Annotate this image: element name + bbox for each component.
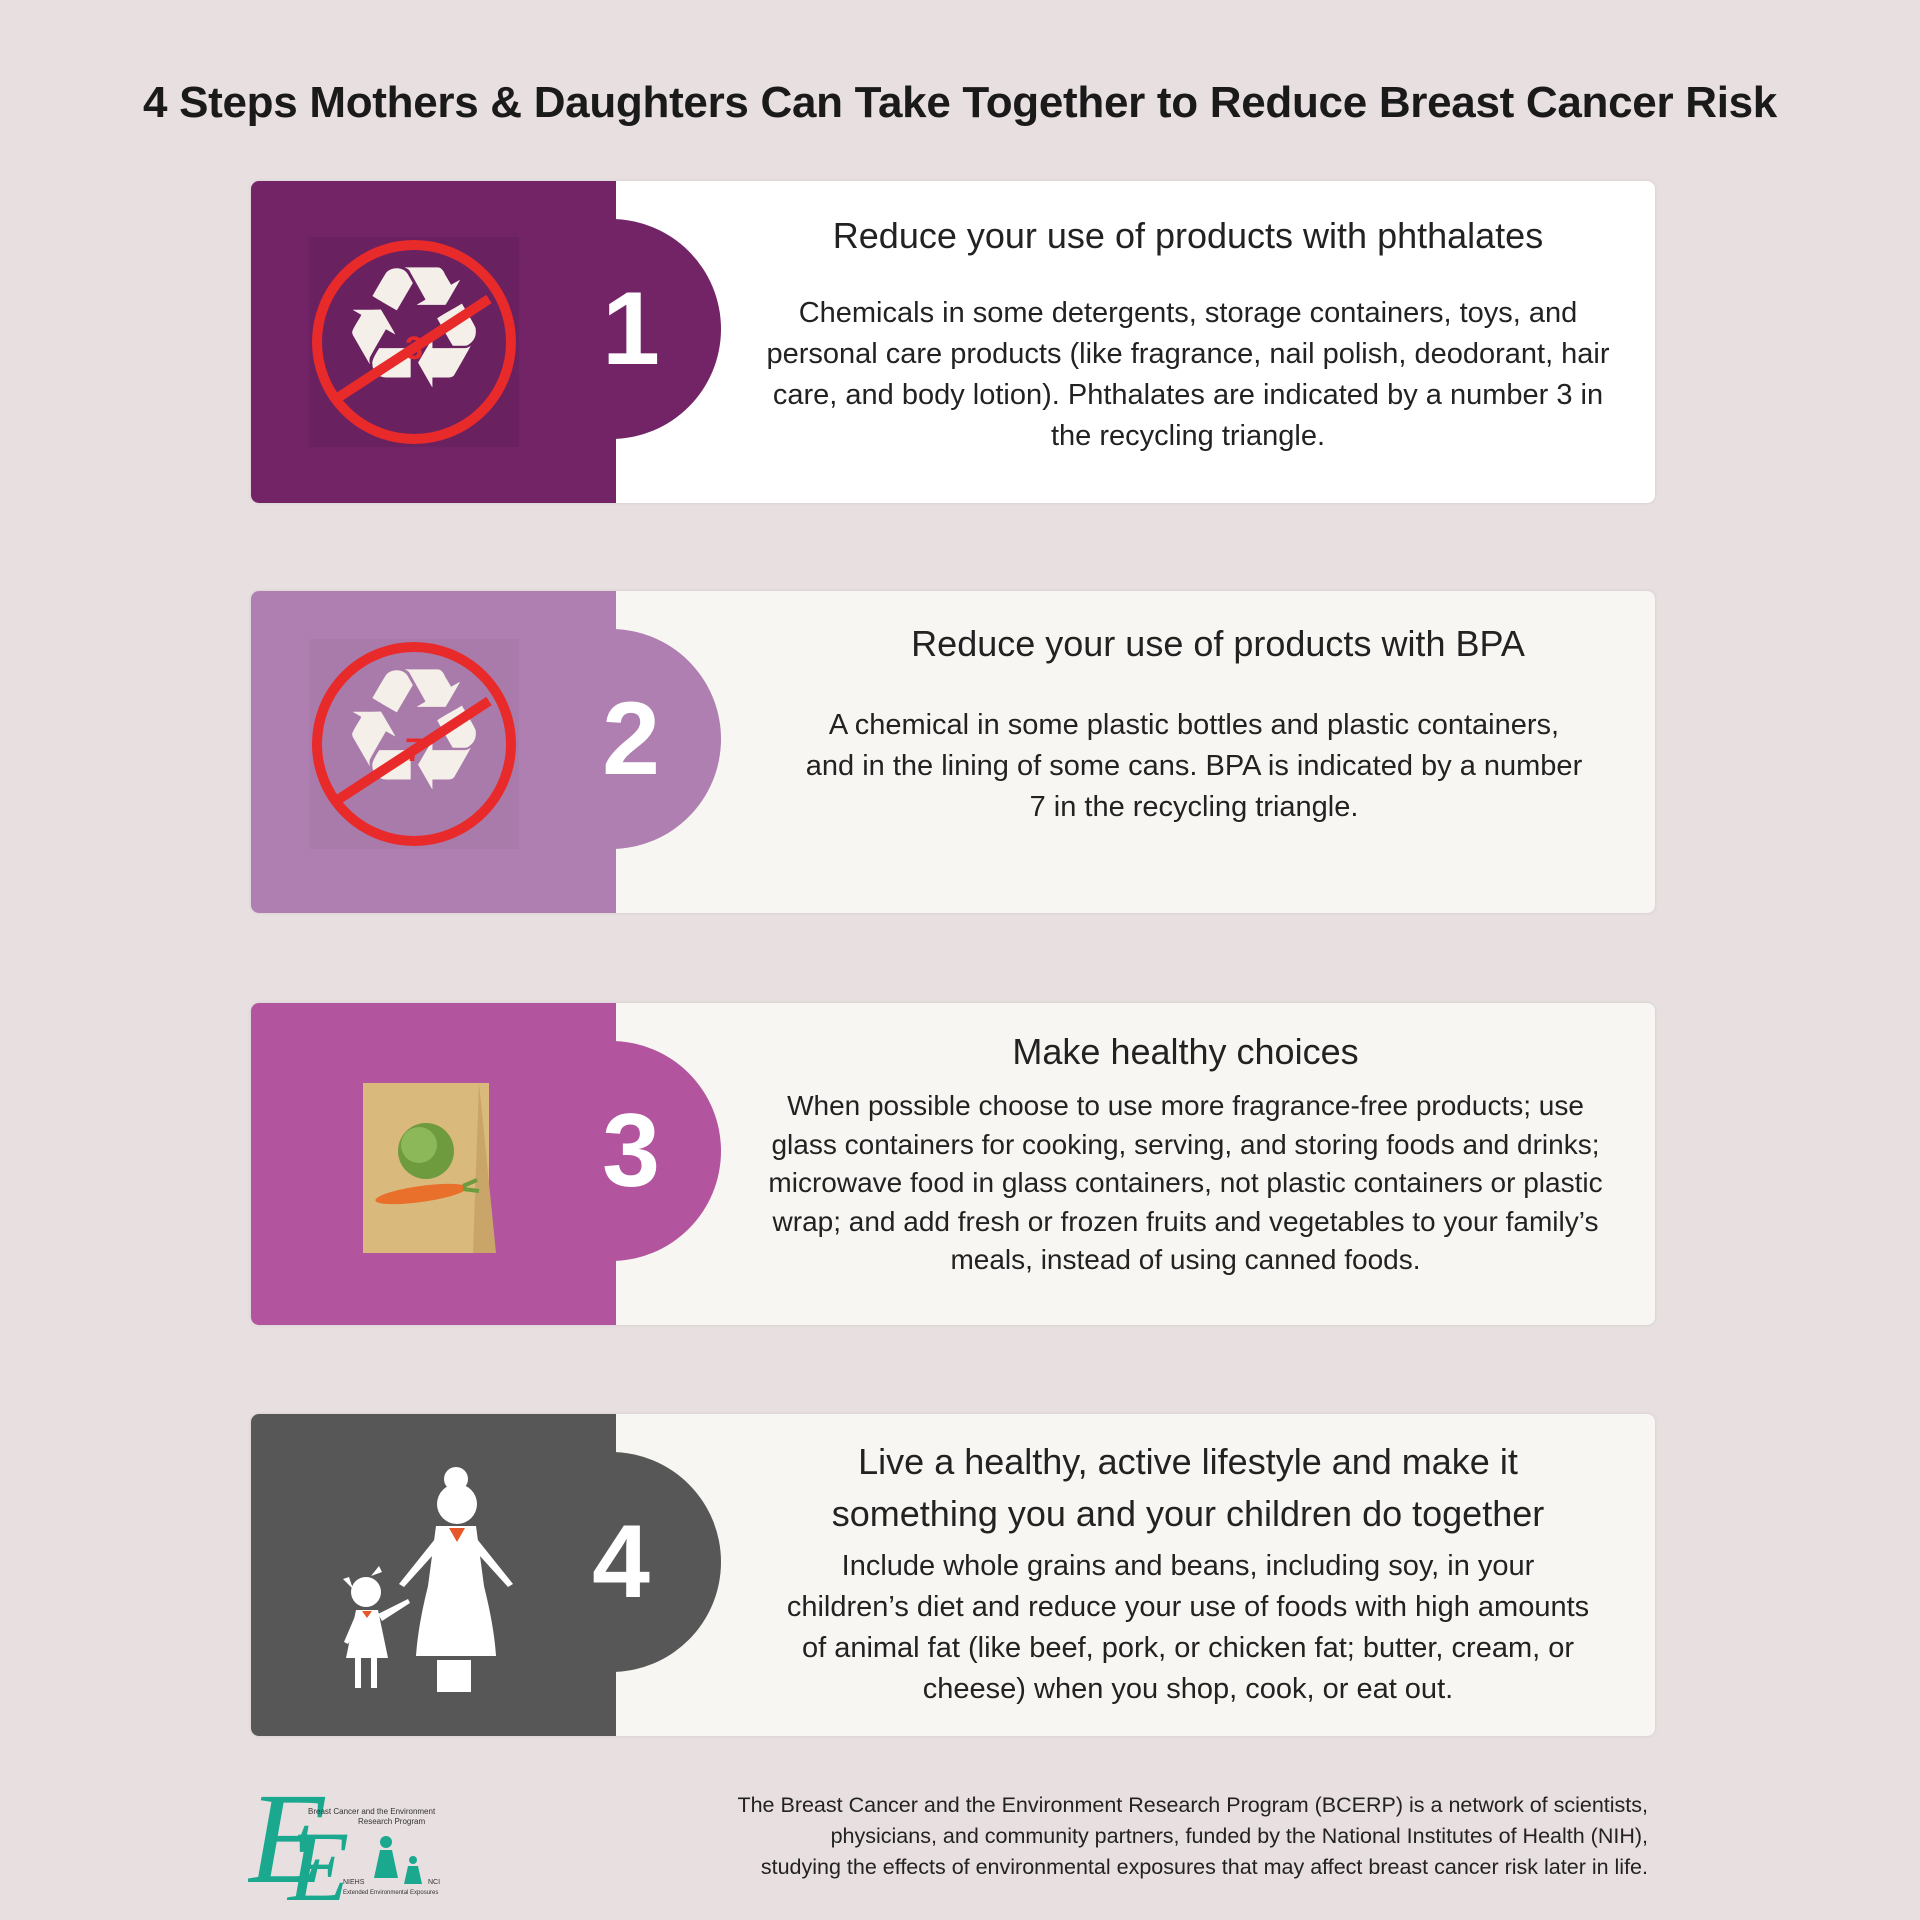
title: 4 Steps Mothers & Daughters Can Take Together to Reduce Breast Cancer Risk: [143, 78, 1777, 127]
icon: no recycle 3: [312, 237, 516, 444]
icon: no recycle 3: 3: [405, 330, 423, 366]
panel: step 1: [251, 181, 1655, 503]
left block 3: [251, 1003, 616, 1325]
semicircle 3: [501, 1041, 721, 1261]
icon: mother and daughter: [343, 1467, 513, 1692]
logo: BCERP: NIEHS: [343, 1879, 365, 1886]
text 1: Reduce your use of products with phthalates: [833, 215, 1543, 256]
text 2: [806, 623, 1582, 823]
text 3: When possible choose to use more fragrance-free products; use glass containers for cooking, serving, and storing foods and drinks; microwave food in glass containers, not plastic containers or plastic wrap; and add fresh or frozen fruits and vegetables to your family’s meals, instead of using canned foods.: [768, 1090, 1603, 1275]
number 1: 1: [602, 271, 660, 387]
logo: BCERP: NCI: [428, 1879, 440, 1886]
text 3: Make healthy choices: [1012, 1031, 1359, 1072]
footer text: physicians, and community partners, funded by the National Institutes of Health (NIH),: [831, 1824, 1648, 1848]
number 4: 4: [592, 1504, 650, 1620]
text 2: A chemical in some plastic bottles and plastic containers, and in the lining of some cans. BPA is indicated by a number 7 in the recycling triangle.: [806, 709, 1582, 823]
semicircle 4: [501, 1452, 721, 1672]
text 4: Include whole grains and beans, including soy, in your children’s diet and reduce your use of foods with high amounts of animal fat (like beef, pork, or chicken fat; butter, cream, or cheese) when you shop, cook, or eat out.: [787, 1550, 1589, 1705]
text 4: Live a healthy, active lifestyle and make it something you and your children do together: [832, 1441, 1544, 1534]
number 3: 3: [602, 1093, 660, 1209]
text 1: [766, 215, 1610, 452]
panel: step 2: [251, 591, 1655, 913]
icon: grocery bag: [363, 1083, 496, 1253]
left block 2: [251, 591, 616, 913]
text 2: Reduce your use of products with BPA: [911, 623, 1525, 664]
number 2: 2: [602, 681, 660, 797]
left block 1: [251, 181, 616, 503]
footer text: [737, 1793, 1648, 1879]
panel: step 3: [251, 1003, 1655, 1325]
icon: no recycle 7: 7: [405, 732, 423, 768]
semicircle 1: [501, 219, 721, 439]
left block 4: [251, 1414, 616, 1736]
footer text: studying the effects of environmental exposures that may affect breast cancer risk later in life.: [761, 1855, 1648, 1879]
icon: no recycle 7: [312, 639, 516, 846]
logo: BCERP: Research Program: [358, 1817, 425, 1826]
panel: step 4: [251, 1414, 1655, 1736]
logo: BCERP: E: [248, 1767, 327, 1908]
text 4: [787, 1441, 1589, 1705]
logo: BCERP: Breast Cancer and the Environment: [308, 1807, 436, 1816]
text 1: Chemicals in some detergents, storage containers, toys, and personal care products (like fragrance, nail polish, deodorant, hair care, and body lotion). Phthalates are indicated by a number 3 in the recycling triangle.: [766, 297, 1610, 452]
logo: BCERP: [248, 1767, 440, 1908]
footer text: The Breast Cancer and the Environment Research Program (BCERP) is a network of scientists,: [737, 1793, 1648, 1817]
logo: BCERP: Extended Environmental Exposures: [343, 1890, 438, 1896]
semicircle 2: [501, 629, 721, 849]
